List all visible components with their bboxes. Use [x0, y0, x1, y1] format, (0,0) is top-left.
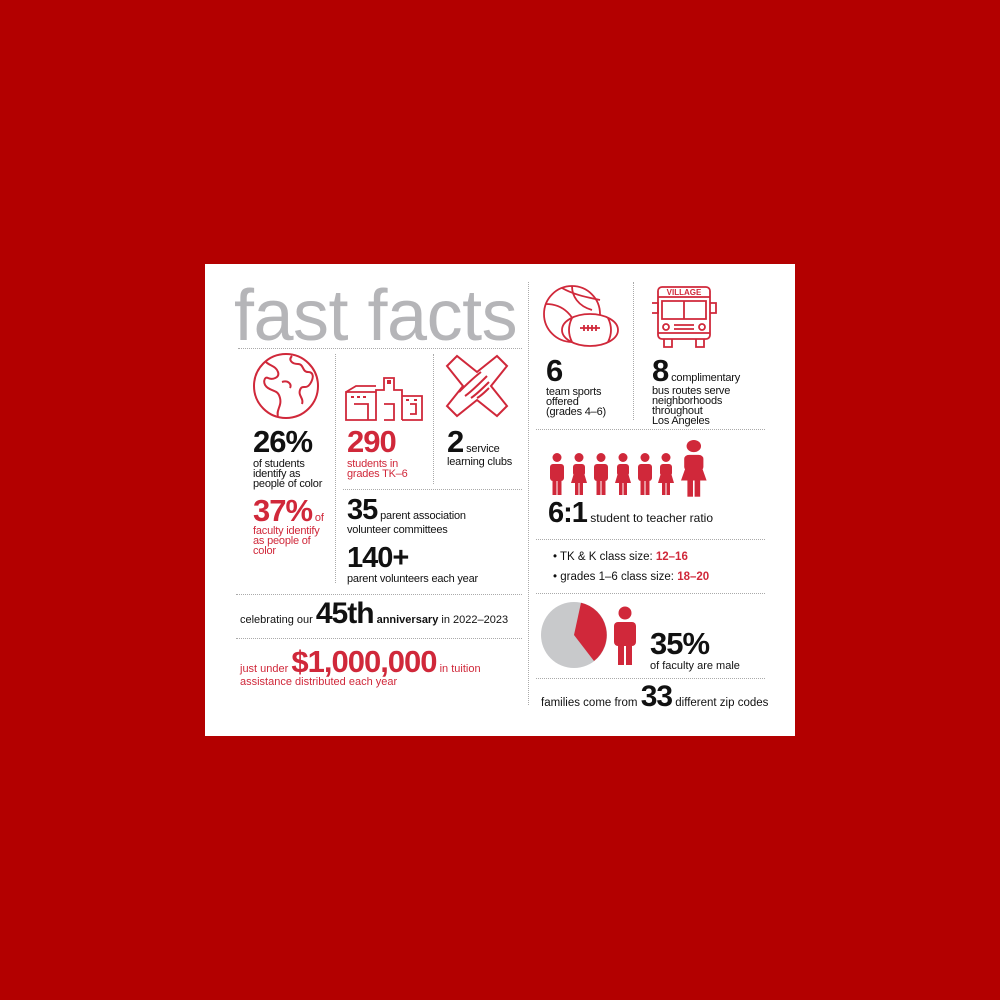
- stat: 140+: [347, 542, 478, 585]
- class sizes list: • grades 1–6 class size: 18–20: [553, 571, 709, 583]
- stat: 6 team sports: offered: [546, 396, 579, 408]
- icon: bus: [652, 286, 717, 348]
- stat: tuition assistance: just under $1,000,000 in tuition: [240, 644, 481, 679]
- card panel: [205, 264, 795, 736]
- stat: 8 bus routes: throughout: [652, 405, 703, 417]
- stat: 6 team sports: team sports: [546, 386, 601, 398]
- stat: 37%: 37% of: [253, 493, 324, 528]
- stat: 290: 290: [347, 424, 396, 459]
- stat: 37%: [253, 493, 324, 557]
- stat: 8 bus routes: 8 complimentary: [652, 353, 740, 388]
- stat: 33 zip codes: families come from 33 different zip codes: [541, 680, 768, 713]
- stat: 37%: color: [253, 545, 276, 557]
- stat: 140+: 140+: [347, 542, 408, 574]
- class sizes list: • TK & K class size: 12–16: [553, 551, 688, 563]
- icon: bus: VILLAGE: [667, 288, 702, 297]
- icon: globe: [253, 353, 319, 419]
- stat: tuition assistance: assistance distributed each year: [240, 676, 397, 688]
- stat: 8 bus routes: bus routes serve: [652, 385, 730, 397]
- stat: 8 bus routes: neighborhoods: [652, 395, 722, 407]
- stat: 2 service clubs: 2 service: [447, 424, 500, 459]
- pie chart: faculty male: [541, 602, 607, 668]
- stat: 6 team sports: 6: [546, 353, 562, 388]
- stat: 26%: of students: [253, 458, 305, 470]
- icon: sports balls: [543, 285, 619, 347]
- stat: 6 team sports: (grades 4–6): [546, 406, 606, 418]
- stat: 2 service clubs: learning clubs: [447, 456, 512, 468]
- icon: man: [614, 606, 636, 665]
- stat: 37%: as people of: [253, 535, 311, 547]
- icon: people ratio: [550, 440, 707, 497]
- stat: 26%: [253, 424, 322, 490]
- stat: 140+: parent volunteers each year: [347, 573, 478, 585]
- stat: 35% male: [650, 626, 740, 672]
- stat: 8 bus routes: [652, 353, 740, 427]
- stat: 26%: identify as: [253, 468, 300, 480]
- stat: 6 team sports: [546, 353, 606, 418]
- stat: 37%: faculty identify: [253, 525, 320, 537]
- stat: 6:1 ratio: 6:1 student to teacher ratio: [548, 497, 713, 529]
- icon: hands: [446, 354, 508, 418]
- stat: 2 service clubs: [447, 424, 512, 468]
- stat: 45th anniversary: celebrating our 45th anniversary in 2022–2023: [240, 597, 508, 630]
- stat: 35 committees: volunteer committees: [347, 524, 448, 536]
- class sizes list: [553, 551, 709, 583]
- stat: 35% male: of faculty are male: [650, 660, 740, 672]
- stat: 8 bus routes: Los Angeles: [652, 415, 710, 427]
- stat: 26%: people of color: [253, 478, 322, 490]
- stat: 35% male: 35%: [650, 626, 709, 661]
- stat: 290: grades TK–6: [347, 468, 408, 480]
- stat: 35 committees: 35 parent association: [347, 494, 466, 526]
- stat: 26%: 26%: [253, 424, 312, 459]
- title: fast facts: [234, 276, 517, 356]
- icon: school: [345, 377, 423, 421]
- stat: 290: [347, 424, 408, 480]
- stat: 290: students in: [347, 458, 398, 470]
